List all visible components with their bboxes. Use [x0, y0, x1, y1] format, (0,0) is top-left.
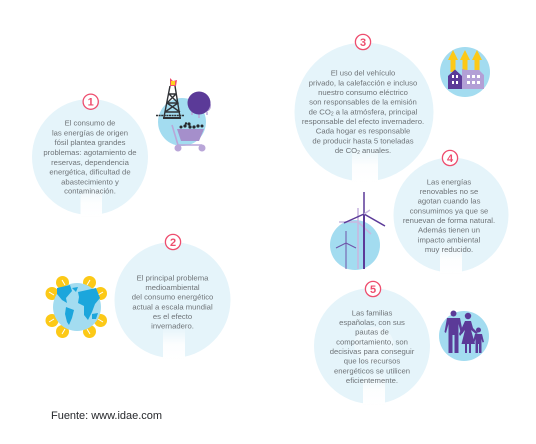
text 3: nuestro consumo eléctrico [318, 88, 408, 97]
flame [170, 78, 177, 86]
text 5: comportamiento, son [336, 337, 408, 346]
badge 2: 2 [170, 237, 176, 249]
text 2: medioambiental [145, 283, 200, 292]
panel 4: renewable energies [394, 150, 508, 274]
text 1: problemas: agotamiento de [43, 148, 137, 157]
text 3: 2 [357, 150, 360, 156]
text 5: pautas de [355, 328, 389, 337]
text 5: eficientemente. [346, 376, 398, 385]
badge 4: 4 [447, 153, 454, 165]
text 1: El consumo de [65, 118, 115, 128]
text 5: energéticos se utilicen [334, 366, 410, 375]
text 3: de CO [335, 146, 391, 156]
source line: Fuente: www.idae.com [51, 410, 162, 422]
text 1: energética, dificultad de [49, 168, 131, 177]
coal cart [172, 122, 206, 152]
text 3: de CO [309, 107, 418, 117]
text 1: abastecimiento y [61, 177, 119, 186]
text 3: a la atmósfera, principal [334, 107, 418, 116]
text 5: Las familias [352, 308, 392, 318]
panel 3: vehicle and CO2 [294, 34, 434, 182]
text 2: invernadero. [151, 321, 194, 330]
text 4: renovables no se [420, 187, 478, 196]
badge 3: 3 [360, 37, 366, 49]
text 4: consumimos ya que se [410, 206, 488, 215]
text 3: 2 [331, 111, 334, 117]
icon: houses with rising arrows [440, 47, 490, 97]
text 1: las energías de origen [52, 128, 128, 137]
text 4: Las energías [427, 178, 471, 186]
text 4: agotan cuando las [418, 197, 481, 206]
icon: oil derrick, gas sphere and coal cart [156, 78, 211, 152]
text 2: actual a escala mundial [132, 302, 213, 311]
badge 1: 1 [88, 97, 94, 109]
panel 5: Spanish families [314, 281, 430, 405]
text 1: fósil plantea grandes [55, 138, 126, 147]
text 2: es el efecto [153, 312, 192, 321]
text 5: españolas, con sus [339, 318, 405, 327]
derrick [156, 86, 184, 118]
badge 3 [355, 34, 371, 50]
text 4: muy reducido. [425, 245, 473, 254]
icon: globe with yellow loops [46, 276, 107, 338]
icon: family [439, 310, 489, 361]
text 3: anuales. [360, 146, 391, 155]
text 1: reservas, dependencia [51, 158, 130, 167]
text 4: renuevan de forma natural. [403, 216, 495, 225]
panel 1: fossil energy problems [32, 94, 148, 217]
gas sphere [188, 92, 211, 118]
text 3: Cada hogar es responsable [316, 126, 410, 136]
text 5: decisivas para conseguir [330, 347, 415, 356]
icon: wind turbines [330, 192, 385, 270]
text 3: privado, la calefacción e incluso [309, 78, 417, 87]
text 4: Además tienen un [418, 226, 480, 235]
panel 2: greenhouse effect [114, 234, 230, 359]
badge 5: 5 [370, 284, 376, 296]
text 3: El uso del vehículo [331, 68, 395, 78]
text 2: del consumo energético [132, 293, 213, 302]
text 2: El principal problema [137, 274, 209, 282]
text 4: impacto ambiental [418, 235, 480, 244]
text 3: responsable del efecto invernadero. [302, 117, 424, 126]
text 3: de producir hasta 5 toneladas [312, 136, 414, 145]
text 5: que los recursos [344, 357, 400, 366]
text 3: son responsables de la emisión [309, 98, 417, 107]
text 1: contaminación. [64, 187, 116, 196]
